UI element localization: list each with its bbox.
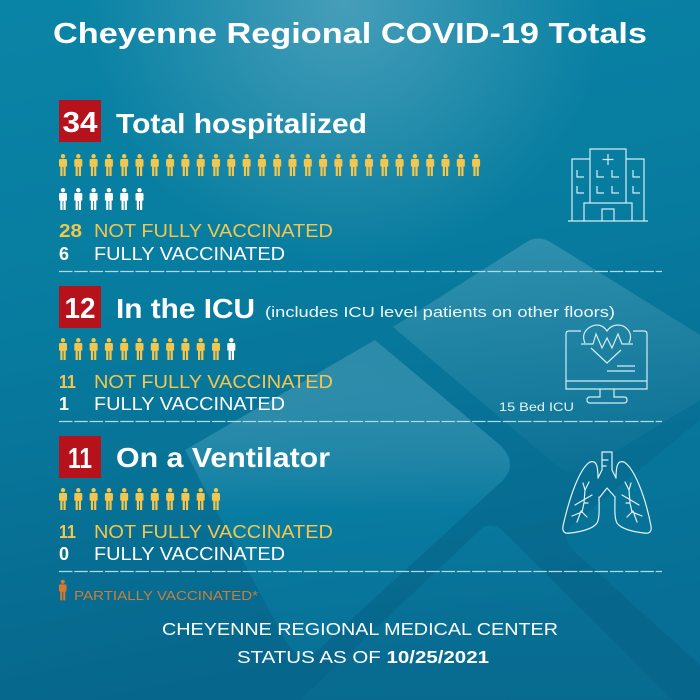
heading: in the ICU: In the ICU xyxy=(116,293,255,324)
icon: ICU monitor with heart xyxy=(566,325,647,403)
legend: 6 fully vaccinated: 6 xyxy=(59,244,69,264)
background rounded diamond shapes xyxy=(185,238,700,700)
legend: 11 not fully vaccinated: 11 xyxy=(59,522,76,542)
legend: 11 not fully vaccinated: 11 xyxy=(59,372,76,392)
badge: 11 xyxy=(59,436,101,478)
title: Cheyenne Regional COVID-19 Totals xyxy=(53,18,647,50)
legend: 6 fully vaccinated: FULLY VACCINATED xyxy=(94,244,285,264)
panel: total hospitalized xyxy=(59,100,480,264)
panel: in the ICU xyxy=(59,286,615,414)
badge: 12 xyxy=(59,286,101,328)
legend: 1 fully vaccinated: 1 xyxy=(59,394,69,414)
badge: 11: 11 xyxy=(68,443,92,475)
footer: status date: STATUS AS OF 10/25/2021 xyxy=(237,647,489,667)
icon: lungs xyxy=(563,452,651,533)
legend: 1 fully vaccinated: FULLY VACCINATED xyxy=(94,394,285,414)
badge: 34: 34 xyxy=(62,107,98,139)
pictogram: 11 not fully vaccinated xyxy=(59,338,220,360)
legend: 0 fully vaccinated: FULLY VACCINATED xyxy=(94,544,285,564)
heading: on a ventilator: On a Ventilator xyxy=(116,442,330,473)
legend: 11 not fully vaccinated: NOT FULLY VACCINATED xyxy=(94,522,333,542)
note: includes ICU level patients: (includes ICU level patients on other floors) xyxy=(265,304,615,321)
pictogram: 11 not fully vaccinated xyxy=(59,488,220,510)
pictogram: 6 fully vaccinated xyxy=(59,188,144,210)
pictogram: 28 not fully vaccinated xyxy=(59,154,480,176)
legend: partially vaccinated xyxy=(59,580,258,603)
legend: partially vaccinated: PARTIALLY VACCINATED* xyxy=(74,588,258,603)
legend: 0 fully vaccinated: 0 xyxy=(59,544,69,564)
legend: 11 not fully vaccinated: NOT FULLY VACCINATED xyxy=(94,372,333,392)
legend: 28 not fully vaccinated: NOT FULLY VACCINATED xyxy=(94,221,333,241)
caption: 15 bed ICU: 15 Bed ICU xyxy=(499,402,574,414)
panel: on a ventilator xyxy=(59,436,333,564)
icon: hospital xyxy=(568,149,648,221)
pictogram: 1 fully vaccinated xyxy=(227,338,235,360)
heading: total hospitalized: Total hospitalized xyxy=(116,108,367,139)
badge: 12: 12 xyxy=(64,293,96,325)
footer: medical center: CHEYENNE REGIONAL MEDICAL CENTER xyxy=(162,619,558,639)
badge: 34 xyxy=(59,100,101,142)
legend: 28 not fully vaccinated: 28 xyxy=(59,221,82,241)
